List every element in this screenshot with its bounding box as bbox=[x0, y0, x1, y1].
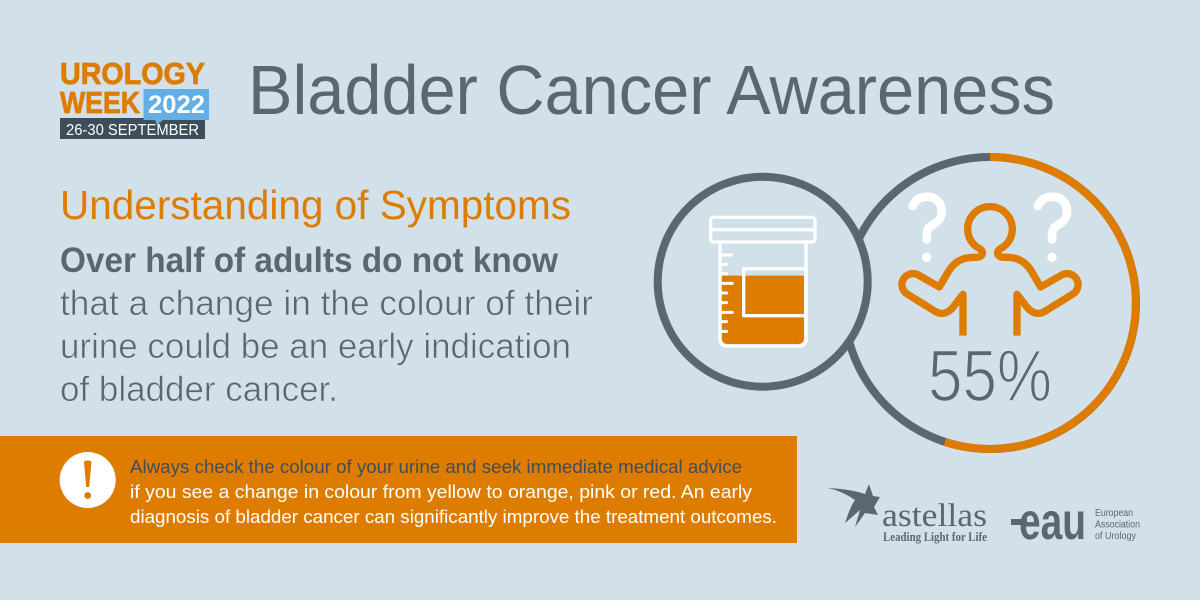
text block: key message: that a change in the colour of their bbox=[60, 284, 593, 323]
panel: advice banner bbox=[0, 436, 797, 543]
title: Bladder Cancer Awareness bbox=[248, 51, 1055, 129]
text block: advice bbox=[130, 456, 777, 527]
logo: Urology Week 2022: UROLOGY bbox=[60, 56, 205, 91]
logo: European Association of Urology: eau bbox=[1019, 493, 1086, 551]
logo: European Association of Urology bbox=[1011, 493, 1140, 551]
text block: key message: of bladder cancer. bbox=[60, 370, 338, 409]
icon: exclamation mark bbox=[60, 452, 116, 508]
logo: astellas bbox=[828, 484, 987, 544]
logo: astellas: Leading Light for Life bbox=[883, 530, 987, 544]
logo: Urology Week 2022: 26-30 SEPTEMBER bbox=[66, 122, 199, 139]
icon: question mark left bbox=[913, 197, 942, 262]
logo: Urology Week 2022: WEEK bbox=[60, 85, 141, 120]
icon: urine sample cup bbox=[711, 217, 815, 346]
icon: question mark right bbox=[1038, 197, 1067, 262]
text block: key message bbox=[60, 241, 593, 409]
logo: European Association of Urology: European bbox=[1095, 508, 1133, 519]
statistic: 55 percent: 55% bbox=[928, 336, 1052, 417]
logo: Urology Week 2022: 2022 bbox=[148, 91, 205, 119]
logo: Urology Week 2022 bbox=[60, 56, 209, 139]
logo: European Association of Urology: Association bbox=[1095, 520, 1140, 530]
text block: advice: diagnosis of bladder cancer can significantly improve the treatment outcomes. bbox=[130, 506, 777, 527]
text block: advice: Always check the colour of your urine and seek immediate medical advice bbox=[130, 456, 742, 477]
text block: key message: urine could be an early indication bbox=[60, 327, 571, 366]
icon: shrugging person bbox=[902, 207, 1078, 336]
subheading: Understanding of Symptoms bbox=[60, 182, 571, 228]
logo: astellas: astellas bbox=[882, 498, 987, 534]
logo: European Association of Urology: of Urology bbox=[1095, 531, 1136, 542]
chart: 55 percent ring bbox=[844, 157, 1136, 449]
panel: sample cup circle bbox=[658, 177, 868, 387]
text block: advice: if you see a change in colour from yellow to orange, pink or red. An early bbox=[130, 481, 753, 502]
text block: key message: Over half of adults do not know bbox=[60, 241, 559, 280]
